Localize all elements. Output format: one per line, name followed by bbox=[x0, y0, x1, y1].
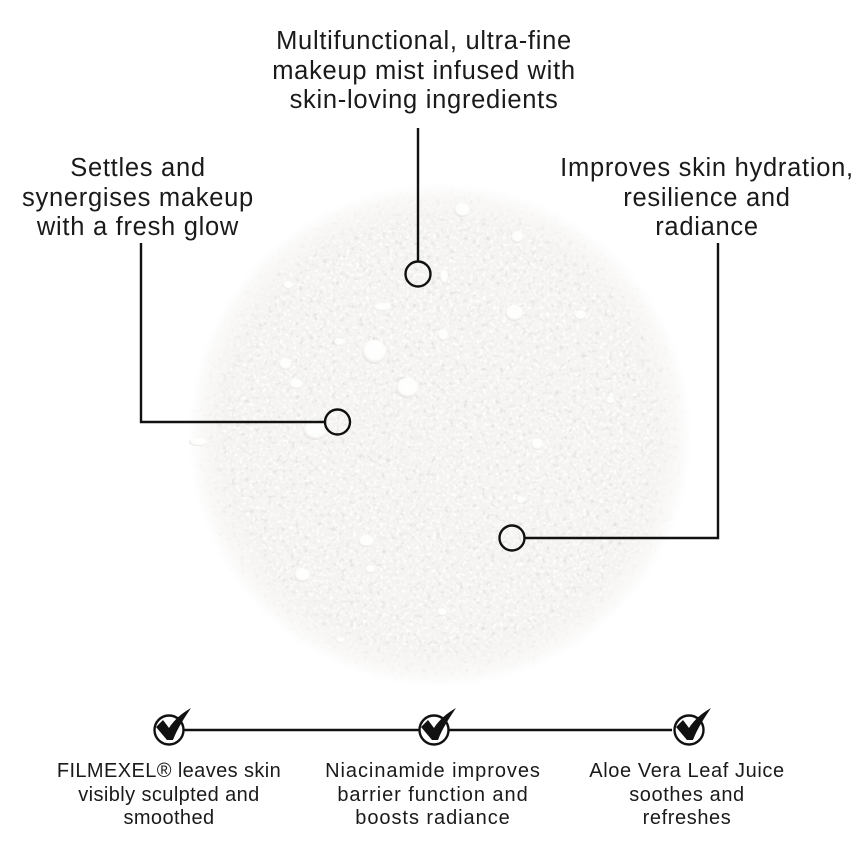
text: benefit 1: FILMEXEL® leaves skin bbox=[57, 760, 281, 782]
text: benefit 3: refreshes bbox=[643, 807, 731, 829]
text: benefit 1: smoothed bbox=[123, 807, 215, 829]
text: right claim: radiance bbox=[655, 213, 759, 241]
callout: right connector bbox=[500, 243, 718, 550]
callout: top connector bbox=[406, 128, 430, 286]
timeline connector bbox=[184, 729, 672, 731]
text: benefit 2: Niacinamide improves bbox=[325, 760, 541, 782]
callout: left connector bbox=[141, 243, 350, 434]
text: left claim: with a fresh glow bbox=[37, 213, 239, 241]
text: left claim: Settles and bbox=[70, 154, 206, 182]
text: right claim: resilience and bbox=[623, 184, 791, 212]
text: benefit 2: barrier function and bbox=[337, 784, 529, 806]
text: benefit 3: Aloe Vera Leaf Juice bbox=[589, 760, 785, 782]
text: benefit 3 bbox=[589, 760, 785, 829]
text: benefit 2 bbox=[325, 760, 541, 829]
text: top claim bbox=[272, 27, 576, 114]
text: benefit 1 bbox=[57, 760, 281, 829]
text: benefit 1: visibly sculpted and bbox=[78, 784, 260, 806]
texture: mist swatch bbox=[189, 191, 684, 677]
text: top claim: Multifunctional, ultra-fine bbox=[276, 27, 572, 55]
text: top claim: skin-loving ingredients bbox=[290, 86, 558, 114]
text: benefit 2: boosts radiance bbox=[355, 807, 511, 829]
icon: check 1 bbox=[154, 708, 191, 744]
text: left claim: synergises makeup bbox=[22, 184, 254, 212]
icon: check 3 bbox=[674, 708, 711, 744]
text: benefit 3: soothes and bbox=[629, 784, 745, 806]
text: top claim: makeup mist infused with bbox=[272, 56, 576, 84]
text: right claim bbox=[560, 154, 854, 241]
icon: check 2 bbox=[420, 708, 456, 744]
text: left claim bbox=[22, 154, 254, 241]
text: right claim: Improves skin hydration, bbox=[560, 154, 854, 182]
